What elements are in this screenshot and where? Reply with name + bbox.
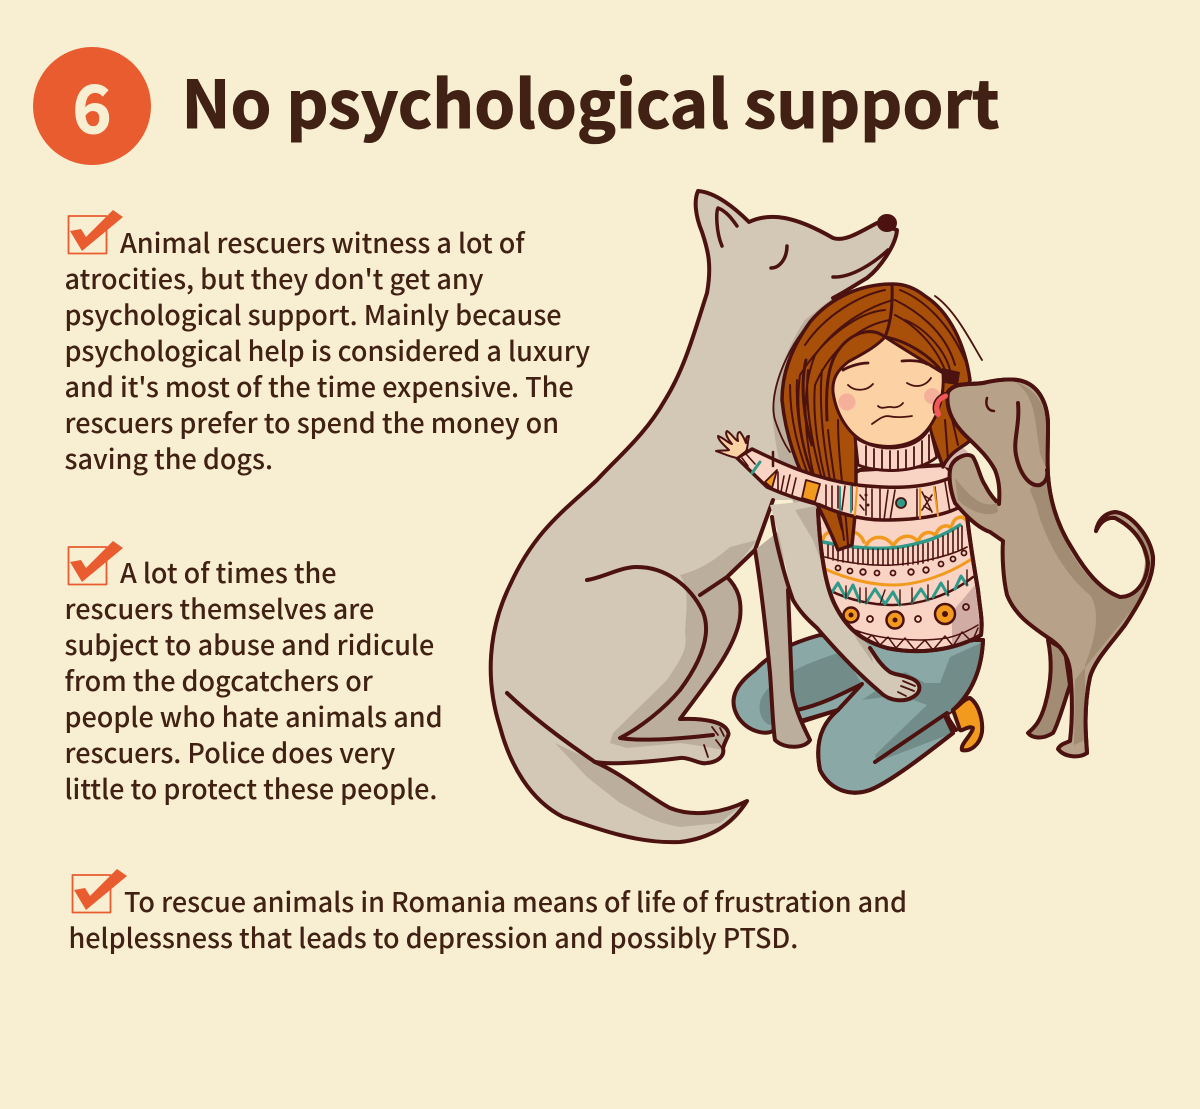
hand — [716, 431, 749, 458]
sweater pattern: scallops — [823, 517, 965, 546]
tongue — [936, 396, 945, 414]
number badge: 6 — [73, 57, 111, 153]
illustration: wolf, girl and dog — [491, 191, 1153, 842]
text block: abuse: from the dogcatchers or — [64, 660, 373, 699]
icon: checkbox 3 — [72, 869, 127, 912]
arm — [737, 449, 966, 520]
text block: atrocities: saving the dogs. — [64, 438, 273, 477]
turtleneck ribs — [866, 435, 929, 471]
wolf toes — [704, 727, 724, 757]
shoe — [953, 698, 982, 750]
text block: abuse — [64, 552, 443, 807]
number badge — [33, 47, 151, 165]
dog outline redraw — [948, 379, 1153, 753]
wolf eye and ear — [717, 208, 888, 277]
shoulder behind hair — [945, 432, 968, 470]
sweater pattern: orange line — [825, 560, 970, 585]
wolf outline — [491, 191, 897, 842]
dog body — [947, 379, 1153, 756]
face features — [848, 378, 931, 424]
girl wisps — [773, 296, 982, 452]
eyebrows — [843, 361, 927, 370]
text block: atrocities: rescuers prefer to spend the money on — [64, 402, 559, 441]
icon: checkbox 1 — [68, 210, 123, 254]
wolf hind leg lines — [595, 500, 773, 763]
text block: abuse: A lot of times the — [120, 552, 337, 591]
sweater outline — [818, 505, 982, 651]
text block: atrocities: Animal rescuers witness a lot of — [120, 222, 525, 261]
text block: conclusion: To rescue animals in Romania means of life of frustration and — [124, 881, 907, 920]
text block: atrocities: atrocities, but they don't get any — [64, 258, 483, 297]
hair tie — [942, 368, 960, 385]
title: No psychological support — [182, 52, 999, 147]
face — [833, 337, 943, 446]
girl hair — [782, 284, 970, 550]
sweater pattern: triangles — [829, 570, 973, 605]
jeans shading — [759, 642, 983, 762]
text block: atrocities — [64, 222, 590, 477]
sweater shadows — [842, 495, 981, 645]
icon: checkbox 2 — [68, 541, 123, 584]
jeans outline details — [797, 684, 956, 762]
text block: conclusion: helplessness that leads to depression and possibly PTSD. — [68, 917, 798, 956]
text block: atrocities: and it's most of the time expensive. The — [64, 366, 574, 405]
text block: abuse: rescuers themselves are — [64, 588, 374, 627]
sweater pattern: stripes — [825, 526, 967, 565]
sweater pattern: circles — [844, 604, 969, 628]
sweater pattern: hem zigzag — [855, 625, 978, 650]
wolf haunch line — [587, 567, 713, 740]
turtleneck — [855, 427, 937, 470]
wolf nose — [877, 214, 897, 232]
hair thick dark sections — [803, 285, 943, 445]
dog shading — [955, 382, 1152, 745]
text block: abuse: people who hate animals and — [64, 696, 443, 735]
wolf near foreleg — [770, 500, 919, 700]
text block: atrocities: psychological help is considered a luxury — [64, 330, 590, 369]
sweater pattern: dots — [836, 550, 966, 576]
dog eye — [986, 398, 994, 411]
text block: atrocities: psychological support. Mainly because — [64, 294, 562, 333]
cheeks — [838, 388, 940, 410]
sweater — [818, 465, 982, 651]
tongue outline — [933, 392, 948, 413]
text block: abuse: rescuers. Police does very — [64, 732, 395, 771]
arm pattern — [742, 454, 965, 520]
wolf tick above arm — [772, 452, 774, 466]
dog ear — [1015, 403, 1047, 485]
text block: conclusion — [68, 881, 907, 956]
text block: abuse: little to protect these people. — [64, 768, 437, 807]
dog hind far leg — [1028, 640, 1070, 738]
jeans — [733, 635, 983, 793]
wolf far foreleg — [755, 530, 810, 747]
wolf body fill — [491, 191, 897, 842]
wolf shading — [555, 296, 840, 827]
hair strands — [790, 290, 965, 545]
text block: abuse: subject to abuse and ridicule — [64, 624, 434, 663]
